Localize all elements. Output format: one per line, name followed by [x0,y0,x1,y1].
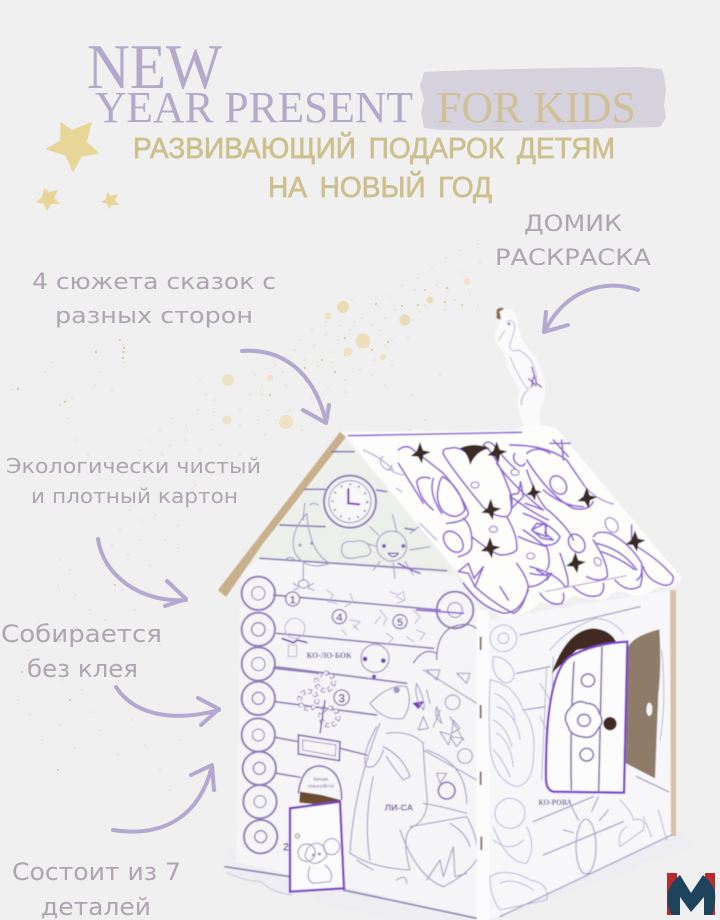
flower pot [298,673,349,761]
ground paper scallops [224,832,692,920]
corner tab strip [477,610,489,920]
log ends [242,682,277,853]
label: eco cardboard: Экологически чистый [6,454,261,478]
number badges: 1 [290,594,296,606]
plank lines [225,667,477,918]
label: assembled without glue [1,620,162,683]
stork [495,309,545,426]
logo: M mark [667,873,715,915]
cut-out star holes [411,441,646,573]
front wall [236,440,490,920]
roof left faint curves [363,450,437,540]
label: house colouring [495,212,651,271]
arrow: to house base [113,765,214,832]
egg with rays [563,797,608,874]
subtitle line 2: НА НОВЫЙ ГОД [268,170,492,204]
label: house colouring: ДОМИК [524,212,622,237]
label: four fairy tale plots: разных сторон [55,304,253,329]
cardboard eave [218,432,346,597]
icon: large gold star [47,123,98,171]
plank lines [260,452,447,673]
label: eco cardboard: и плотный картон [31,484,238,508]
fairy tale caption: Kolobok: КО-ЛО-БОК [307,651,352,660]
title: YEAR PRESENT: YEAR PRESENT [95,83,413,132]
label: seven parts [12,858,181,920]
label: assembled without glue: Собирается [1,620,162,648]
arrow: to roof [242,351,329,423]
label: house colouring: РАСКРАСКА [495,246,651,271]
arrow: to house stork [544,286,638,332]
roof cloud scales left half [398,442,550,613]
spider [293,580,314,590]
icon: sun [367,515,430,578]
front wall lower drawings [225,667,478,918]
house illustration [218,308,692,920]
front wall upper drawings [242,452,487,681]
label: assembled without glue: без клея [27,655,138,683]
fairy tale caption: fox: ЛИ-СА [385,803,414,813]
scene drawings [489,618,667,910]
title: FOR KIDS: FOR KIDS [437,83,636,132]
apple tree [410,670,478,887]
subtitle line 1: РАЗВИВАЮЩИЙ ПОДАРОК ДЕТЯМ [133,131,615,165]
roof top line [348,432,522,436]
log ends [242,577,473,681]
number badges: 5 [397,617,403,629]
roof sheet [342,425,682,617]
arrow: to wall cardboard [98,539,186,606]
paint brush highlight [420,67,666,131]
door arch sign [298,766,342,807]
label: four fairy tale plots [32,270,276,329]
roof cloud scales right half [510,440,673,604]
hidden number 2: 2 [283,842,289,854]
stork and roof [342,308,682,617]
roof edge cardboard [573,457,633,527]
open door [546,642,627,793]
side wall cardboard edge [670,590,676,836]
small white door [290,802,344,892]
flower pot: 3 [338,691,345,705]
purple bow marks [282,638,307,643]
number badges [286,592,407,629]
side planks [500,607,672,917]
cardboard peg [497,308,503,320]
side wall scene caption: КО-РОВА [538,798,572,807]
icon: moon [285,503,330,580]
icon: small gold star left [36,188,60,211]
side wall drawings [477,607,672,920]
label: eco cardboard [6,454,261,508]
title: NEW: NEW [87,31,223,102]
icon: cloud [341,541,371,558]
gable shading [243,440,455,575]
fox in dress [350,686,443,887]
gold glitter trail [12,244,480,800]
open shutter [626,629,660,778]
window opening [552,628,617,673]
tree crown [413,624,487,663]
number badges: 4 [336,612,343,624]
mouse [298,839,340,883]
flower clusters [285,590,425,657]
door arch sign: пожалуйста! [308,785,335,790]
door arch sign: Заходи, [313,778,329,783]
icon: small gold star right [101,192,119,209]
side wall [486,590,672,920]
kolobok face [361,644,389,679]
icon: clock [324,476,376,528]
label: seven parts: Состоит из 7 [12,858,181,886]
label: four fairy tale plots: 4 сюжета сказок с [32,270,276,295]
arrow: to wall joint [116,687,219,725]
